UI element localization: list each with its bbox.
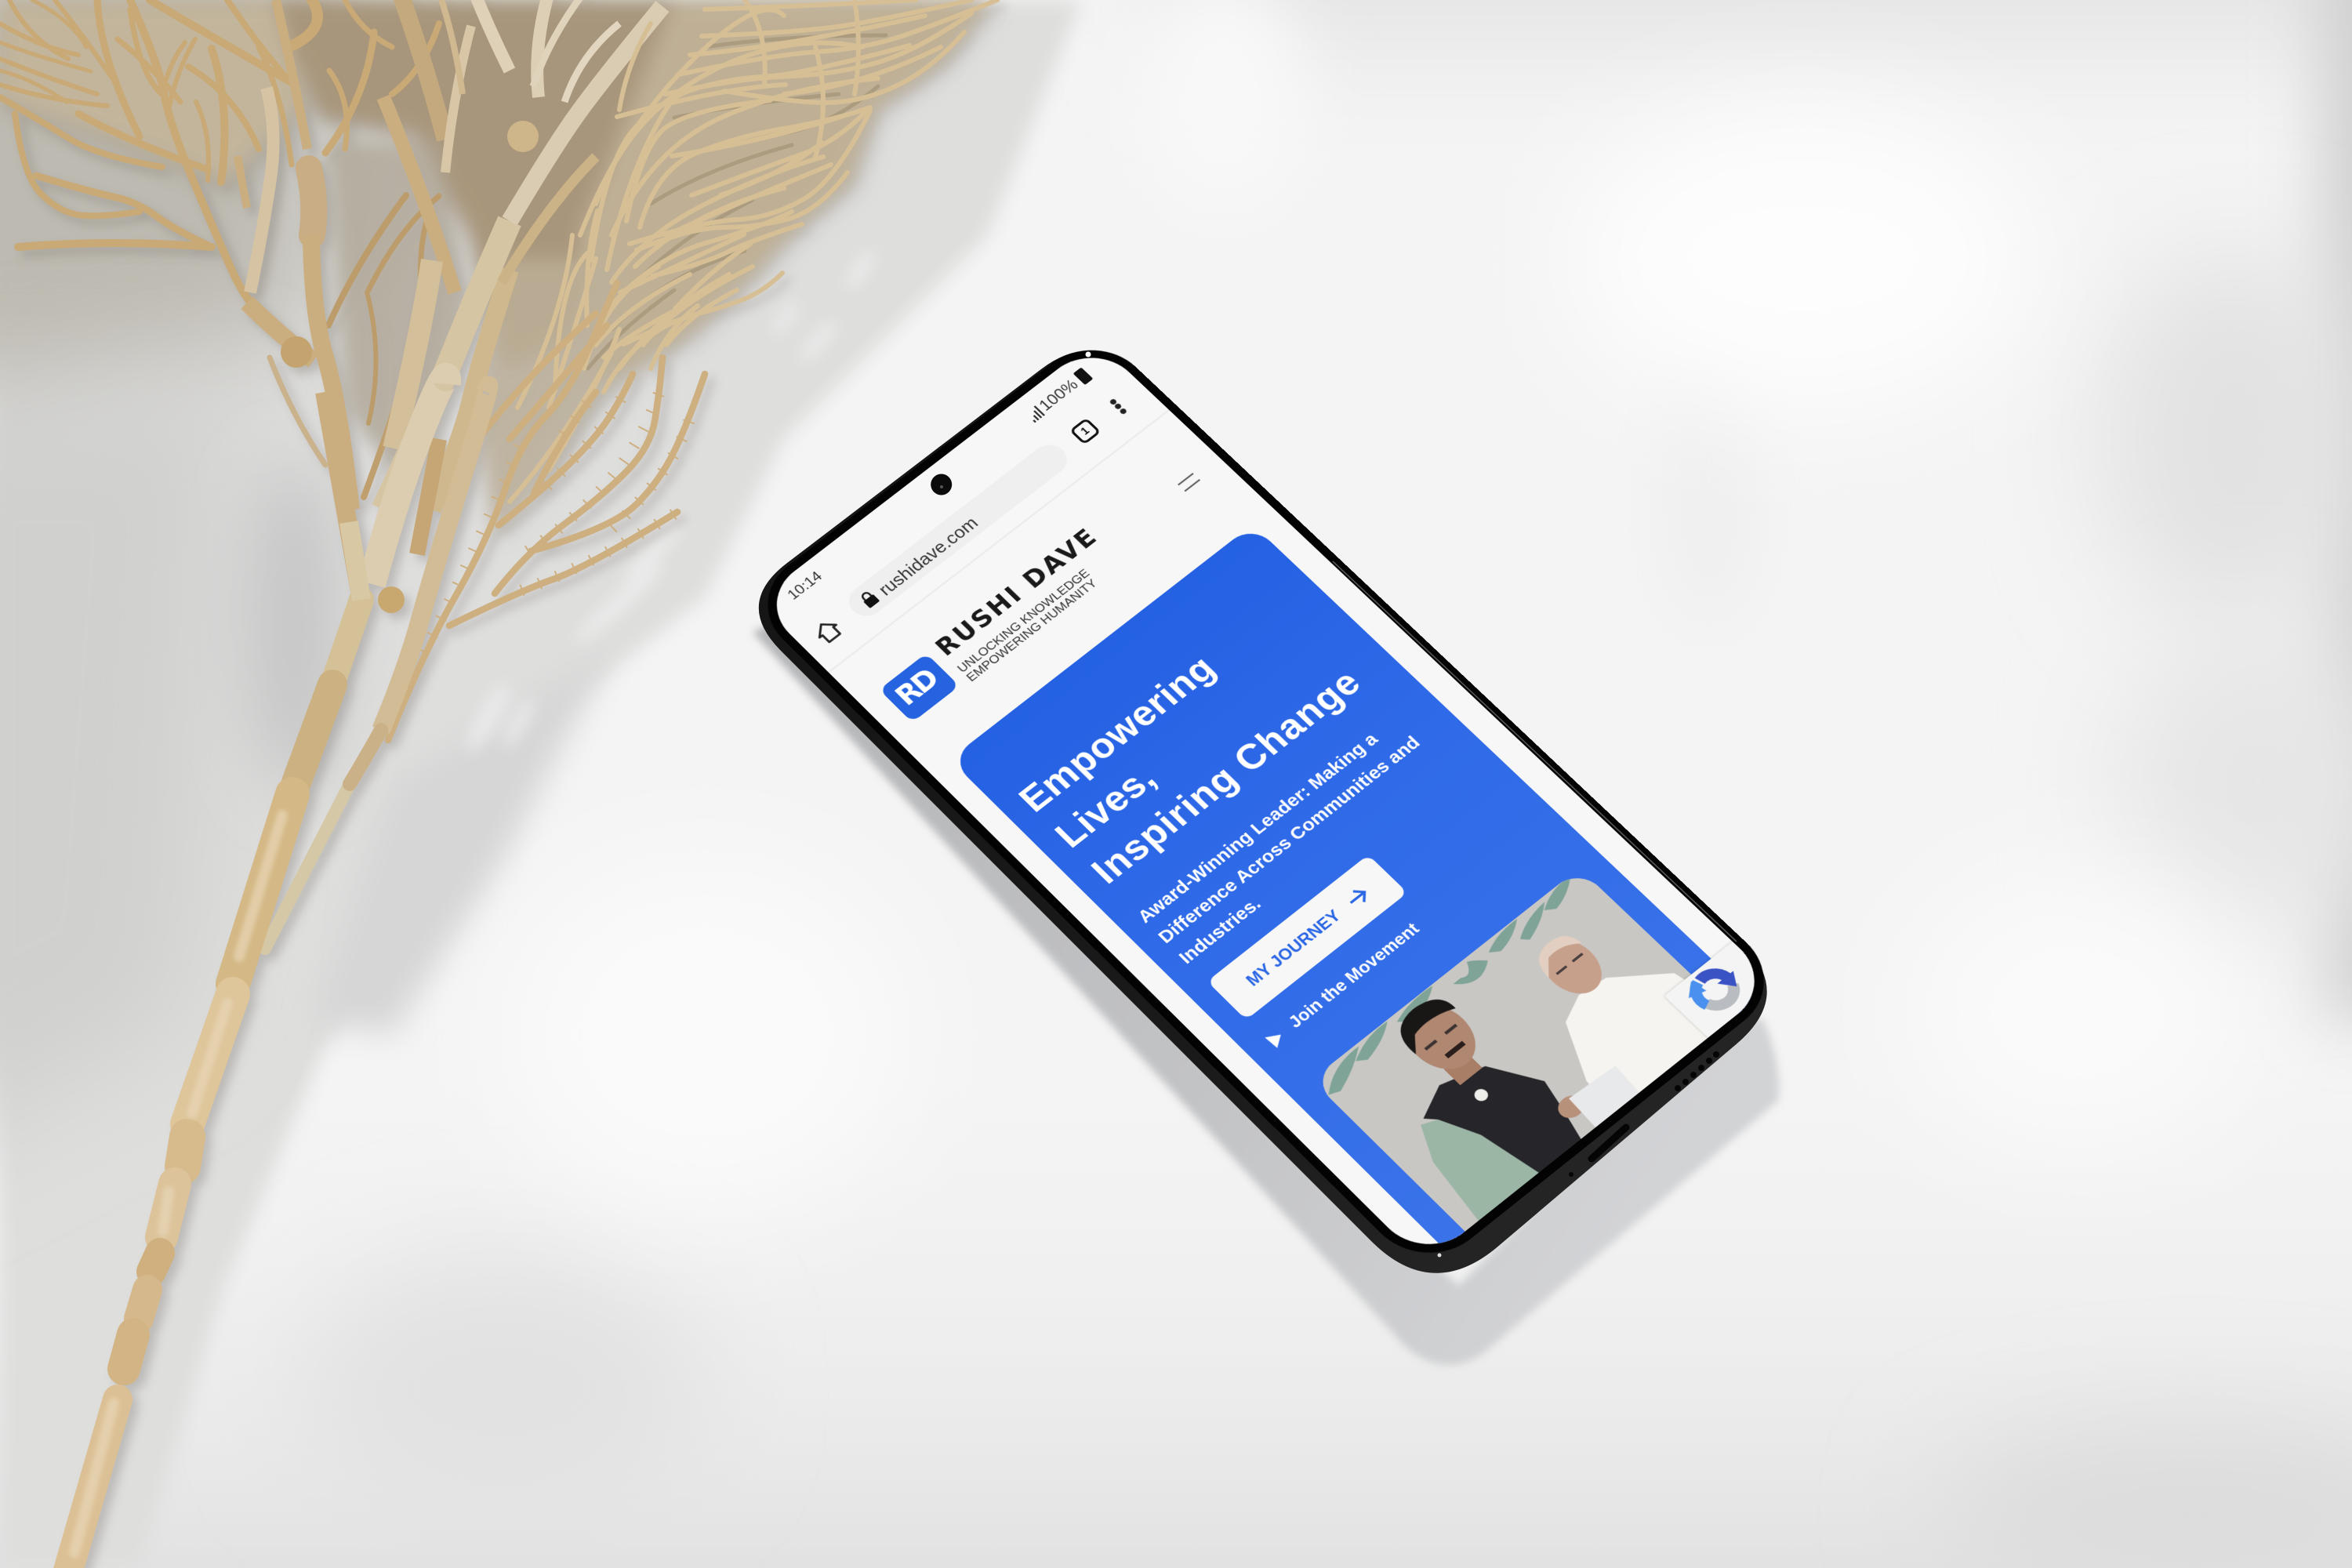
browser divider [828, 409, 1170, 673]
battery percentage: 100% [1036, 376, 1082, 414]
usb port [1592, 1127, 1626, 1159]
hero heading: Empowering [1011, 648, 1224, 819]
pale thick central stems [383, 6, 662, 510]
logo letters: RD [888, 663, 944, 711]
url text: rushidave.com [875, 514, 982, 599]
url pill [842, 439, 1074, 622]
status bar time: 10:14 [784, 568, 826, 603]
dark gaps in fan [588, 35, 886, 368]
phone cast shadow [753, 619, 1779, 1365]
dried plant branch [0, 0, 997, 1568]
man in white shirt [1488, 892, 1744, 1117]
brand name: RUSHI DAVE [929, 522, 1104, 661]
hero panel [949, 524, 1760, 1254]
hero heading: Lives, [1047, 757, 1164, 855]
button label: MY JOURNEY [1242, 906, 1345, 989]
hero subtext: Difference Across Communities and [1154, 733, 1425, 947]
icon: tabs [1069, 418, 1102, 445]
icon: play triangle [1265, 1034, 1281, 1048]
icon: front camera [931, 474, 952, 495]
recaptcha badge [1664, 937, 1787, 1041]
icon: recaptcha [1688, 967, 1740, 1011]
brand tagline: EMPOWERING HUMANITY [964, 577, 1100, 684]
button: my journey [1207, 855, 1407, 1020]
icon: menu dots [1109, 398, 1127, 414]
icon: lock [861, 591, 880, 608]
curved fan branches [510, 0, 997, 502]
plant interior tone [0, 0, 992, 533]
battery icon [1073, 367, 1093, 385]
wall leaf sculpture [1312, 875, 1591, 1098]
link: join the movement: Join the Movement [1284, 919, 1423, 1032]
hand and card [1553, 1061, 1646, 1142]
hero subtext: Industries. [1174, 894, 1265, 967]
microphone hole [1569, 1172, 1573, 1177]
left stem [238, 0, 619, 600]
icon: arrow [1350, 889, 1367, 904]
thin left twigs [0, 0, 439, 497]
speaker grille [1675, 1051, 1719, 1091]
photo wall [1312, 868, 1740, 1236]
icon: home [818, 622, 842, 644]
edge highlights [1085, 351, 1737, 1258]
icon: hamburger menu [1178, 472, 1201, 492]
spiny lower twigs [388, 283, 705, 740]
phone body [759, 351, 1767, 1273]
logo badge [879, 653, 960, 722]
man in dark vest [1330, 984, 1599, 1226]
middle trunks [296, 377, 488, 782]
icon: tabs: 1 [1078, 425, 1092, 437]
segmented bottom stem [67, 794, 292, 1568]
photo [1312, 868, 1740, 1236]
signal icon [1033, 405, 1046, 423]
hero subtext: Award-Winning Leader: Making a [1134, 729, 1382, 927]
brand tagline: UNLOCKING KNOWLEDGE [954, 567, 1093, 675]
phone screen [756, 340, 1777, 1264]
hero heading: Inspiring Change [1083, 662, 1369, 891]
